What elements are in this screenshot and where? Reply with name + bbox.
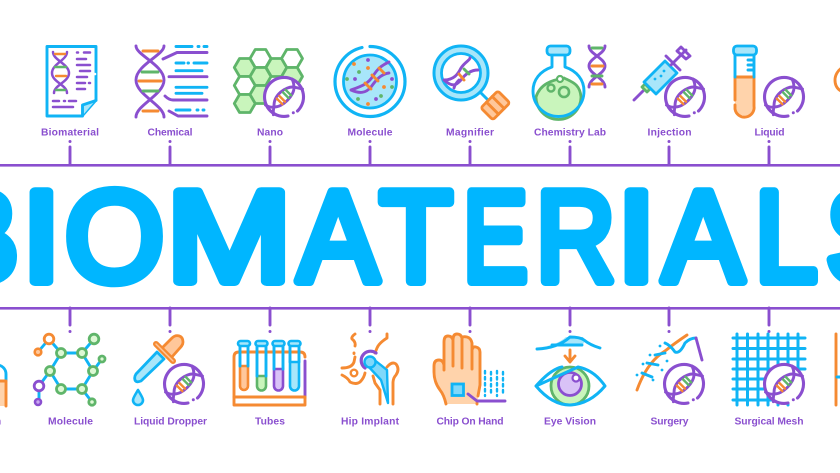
icon: chemistry lab flask xyxy=(533,46,605,120)
label: Magnifier: Magnifier xyxy=(446,128,494,138)
title: A xyxy=(663,165,743,309)
bottom rule xyxy=(0,307,840,310)
icon: chemical dna with lines xyxy=(136,46,207,117)
icon: molecule structure xyxy=(34,334,105,405)
icon: cropped item at right edge xyxy=(836,334,840,405)
label: Hip Implant: Hip Implant xyxy=(341,416,400,428)
icon: nano hexagons xyxy=(234,50,304,116)
icon: biomaterial document xyxy=(47,46,96,116)
title: M xyxy=(167,165,292,309)
label: Chip On Hand: Chip On Hand xyxy=(436,416,504,428)
icon: liquid test tube xyxy=(734,46,804,117)
icon: cropped flask at right edge xyxy=(835,67,840,92)
title: T xyxy=(380,165,452,309)
icon: eye vision xyxy=(535,337,606,405)
title: L xyxy=(755,165,817,309)
icon: molecule petri dish xyxy=(335,46,405,117)
icon: surgical mesh xyxy=(733,334,808,408)
label: Chemistry Lab: Chemistry Lab xyxy=(534,128,606,138)
icon: injection syringe xyxy=(634,47,705,116)
top connector ticks xyxy=(68,140,770,165)
icon: cropped implant at left edge xyxy=(0,365,6,406)
label: Surgical Mesh: Surgical Mesh xyxy=(734,416,804,428)
icon: tubes rack xyxy=(234,341,305,405)
icon: surgery incision xyxy=(636,335,704,404)
title: R xyxy=(536,165,615,309)
label: Biomaterial: Biomaterial xyxy=(41,128,99,138)
label: Molecule bottom: Molecule xyxy=(48,416,93,428)
icon: liquid dropper xyxy=(133,336,204,405)
title: A xyxy=(298,165,378,309)
label: Molecule: Molecule xyxy=(348,128,393,138)
icon: chip on hand xyxy=(434,334,505,404)
label: Chemical: Chemical xyxy=(148,128,193,138)
icon: magnifier xyxy=(434,46,510,120)
bottom connector ticks xyxy=(68,308,770,333)
label: Liquid Dropper: Liquid Dropper xyxy=(134,416,207,428)
title: E xyxy=(463,165,528,309)
icon: hip implant xyxy=(342,334,398,404)
label: Injection: Injection xyxy=(648,128,692,138)
label: Liquid: Liquid xyxy=(754,128,784,138)
label: Tubes: Tubes xyxy=(255,416,285,428)
top rule xyxy=(0,164,840,167)
title: I xyxy=(22,165,61,309)
title: O xyxy=(65,165,164,309)
label: Surgery: Surgery xyxy=(650,416,689,428)
label: Nano: Nano xyxy=(257,128,283,138)
title: I xyxy=(617,165,656,309)
label: Eye Vision: Eye Vision xyxy=(544,416,596,428)
